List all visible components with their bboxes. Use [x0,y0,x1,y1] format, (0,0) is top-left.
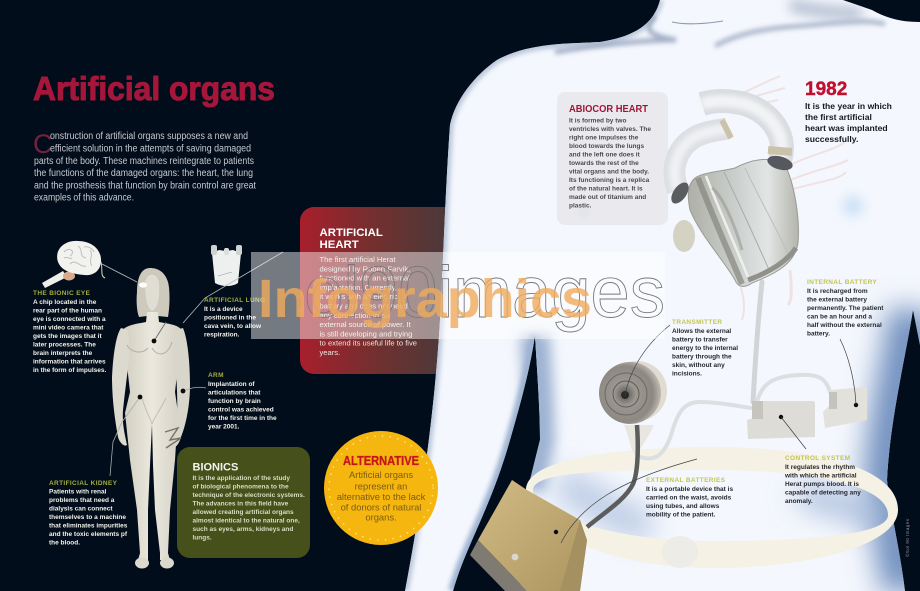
callout: internal battery: half without the external [807,322,882,329]
callout: transmitter: battery through the [672,354,732,360]
callout: the bionic eye: information that arrives [33,358,106,366]
intro text: efficient solution in the attempts of saving damaged [50,144,251,154]
panel: abiocor heart: blood towards the lungs [569,143,644,150]
callout: internal battery: battery. [807,330,830,338]
callout: alternative: of donors of natural [341,502,421,512]
intro text: onstruction of artificial organs supposes a new and [50,131,248,142]
callout: arm: function by brain [208,398,261,405]
callout: control system [784,455,861,505]
heart panel text: functioned with an external [320,274,410,283]
callout: external batteries: using tubes, and allows [646,503,720,510]
panel: abiocor heart: made out of titanium and [569,194,646,201]
panel: abiocor heart: right one impulses the [569,134,639,142]
heart panel text: implantation. Currently, [320,283,397,292]
intro text: parts of the body. These machines reintegrate to patients [34,156,254,167]
callout: the bionic eye: mini video camera that [33,324,104,332]
callout: the bionic eye: eye is connected with a [33,316,106,323]
heart panel text: external source of power. It [320,320,412,329]
callout: 1982: heart was implanted [805,123,888,133]
panel: bionics: of biological phenomena to the [192,484,289,490]
callout: transmitter [672,319,738,378]
callout: the bionic eye: A chip located in the [33,299,97,306]
callout: external batteries: EXTERNAL BATTERIES [646,477,726,484]
heart panel text: any connection to an [320,311,390,320]
callout: arm: for the first time in the [208,415,277,422]
callout: external batteries [646,477,733,518]
callout: artificial kidney: dialysis can connect [49,506,113,512]
human figure [110,252,283,568]
panel: bionics: technique of the electronic systems. [192,492,305,499]
heart panel text: years. [320,348,340,357]
callout: internal battery: INTERNAL BATTERY [807,279,877,286]
callout: artificial kidney: Patients with renal [49,488,107,496]
illustration: external battery pack [470,480,587,591]
callout: artificial kidney: that eliminates impurities [49,522,128,530]
panel: bionics: It is the application of the study [192,475,290,482]
panel: bionics: The advances in this field have [192,500,289,508]
callout: the bionic eye: rear part of the human [33,308,102,314]
panel: abiocor heart: of the natural heart. It is [569,186,643,192]
panel: abiocor heart [557,92,668,225]
panel: abiocor heart: towards the rest of the [569,160,639,167]
callout: internal battery: It is recharged from [807,288,868,295]
illustration: pump cables [640,282,830,459]
callout: alternative: represent an [355,480,407,492]
callout: artificial lung: It is a device [204,306,243,313]
callout: alternative: organs. [365,512,397,522]
callout: control system: It regulates the rhythm [785,464,855,471]
heart panel text [320,227,417,357]
callout: artificial lung: respiration. [204,332,240,338]
icon: artificial lung [211,245,242,286]
callout: control system: capable of detecting any [785,490,861,496]
callout: 1982 [805,79,892,144]
watermark: Infographics [258,269,592,329]
heart panel text: to extend its useful life to five [320,339,417,348]
callout: artificial kidney: and the toxic elements pf [49,531,128,538]
callout: external batteries: It is a portable device that is [646,486,733,493]
heart panel text: ARTIFICIAL [320,227,383,239]
panel: artificial heart background [300,207,470,374]
callout: the bionic eye: gets the images that it [33,333,102,340]
intro text [33,129,256,204]
callout: arm: year 2001. [208,424,240,430]
callout: 1982: It is the year in which [805,101,892,111]
watermark: Sol90images [257,253,665,333]
panel: bionics [177,447,310,558]
callout: transmitter: skin, without any [672,362,725,369]
intro text: examples of this advance. [34,192,134,204]
illustration: transmitter [587,361,667,527]
panel: abiocor heart: and the left one does it [569,152,641,158]
callout: the bionic eye: in the form of impulses. [33,367,107,374]
callout: internal battery: permanently. The patient [807,305,884,312]
callout: arm [208,372,277,430]
callout: control system: Herat pumps blood. It is [785,481,859,488]
callout: the bionic eye: brain interprets the [33,350,93,357]
callout: external batteries: mobility of the patient. [646,512,716,518]
panel: abiocor heart: vital organs and the body. [569,168,649,176]
illustration: waist belt [526,447,898,568]
callout: 1982: successfully. [805,134,858,144]
callout: transmitter: TRANSMITTER [672,319,722,326]
callout: artificial lung: cava vein, to allow [204,323,262,330]
callout: internal battery: the external battery [807,296,867,304]
callout: transmitter: energy to the internal [672,345,738,352]
callout: arm: Implantation of [208,381,255,388]
callout: alternative: alternative to the lack [337,491,426,502]
callout: arm: ARM [208,372,224,379]
panel: bionics: BIONICS [192,462,238,474]
callout: the bionic eye [33,290,107,374]
copyright credit: ©Sol 90 Images [904,518,910,557]
callout: artificial kidney: themselves to a machine [49,514,126,521]
illustration: control unit [747,401,815,439]
heart panel text: HEART [320,239,359,251]
callout: control system: anomaly. [785,498,813,505]
panel: abiocor heart: It is formed by two [569,118,626,124]
heart panel text: is still developing and trying [320,329,412,338]
heart panel text: designed by Robert Farvik, [320,264,410,273]
icon: brain with bionic eye [42,241,137,288]
panel: abiocor heart: ABIOCOR HEART [569,104,649,115]
callout: artificial kidney [49,480,128,546]
callout: 1982: 1982 [805,79,847,100]
panel: abiocor heart: plastic. [569,202,592,210]
callout: artificial kidney: ARTIFICIAL KIDNEY [49,480,118,487]
callout: transmitter: incisions. [672,370,702,378]
illustration: belt clasp [662,536,698,568]
heart panel text: battery and does not need [320,302,408,310]
callout: alternative: Artificial organs [349,469,413,480]
callout: arm: articulations that [208,390,261,396]
callout: alternative [324,431,438,545]
callout: artificial lung: ARTIFICIAL LUNG [204,297,265,304]
leader lines: right side [561,325,856,543]
callout: 1982: the first artificial [805,112,872,122]
illustration: abiocor artificial heart [668,76,848,320]
callout: artificial lung [204,297,265,338]
intro text: the functions of the damaged organs: the heart, the lung [34,168,253,179]
panel: bionics: such as eyes, arms, kidneys and [192,526,293,533]
callout: alternative: ALTERNATIVE [343,453,419,468]
callout: transmitter: battery to transfer [672,336,728,344]
callout: arm: control was achieved [208,406,274,414]
heart panel text: it works with an electric [320,292,398,301]
callout: artificial kidney: problems that need a [49,497,115,504]
callout: artificial kidney: the blood. [49,540,80,546]
callout: the bionic eye: later processes. The [33,342,96,348]
callout: external batteries: carried on the waist, avoids [646,494,732,502]
title: Artificial organs [33,70,275,107]
panel: abiocor heart: Its functioning is a replica [569,177,650,184]
callout: internal battery: can be an hour and a [807,314,872,320]
intro text: and the prosthesis that function by brain control are great [34,180,256,192]
callout: the bionic eye: THE BIONIC EYE [33,290,91,297]
callout: control system: CONTROL SYSTEM [785,455,850,462]
callout: control system: with which the artificial [784,472,857,480]
torso illustration [405,0,920,591]
panel: bionics: almost identical to the natural one, [192,518,300,524]
intro text: C [33,129,52,159]
heart panel text: The first artificial Herat [320,255,396,264]
illustration: internal battery [823,387,867,428]
callout: internal battery [807,279,884,338]
panel: bionics: lungs. [192,534,212,542]
callout: artificial lung: positioned in the [204,314,256,322]
panel: abiocor heart: ventricles with valves. The [569,126,651,133]
callout: transmitter: Allows the external [672,328,731,335]
panel: bionics: allowed creating artificial organs [192,509,294,516]
